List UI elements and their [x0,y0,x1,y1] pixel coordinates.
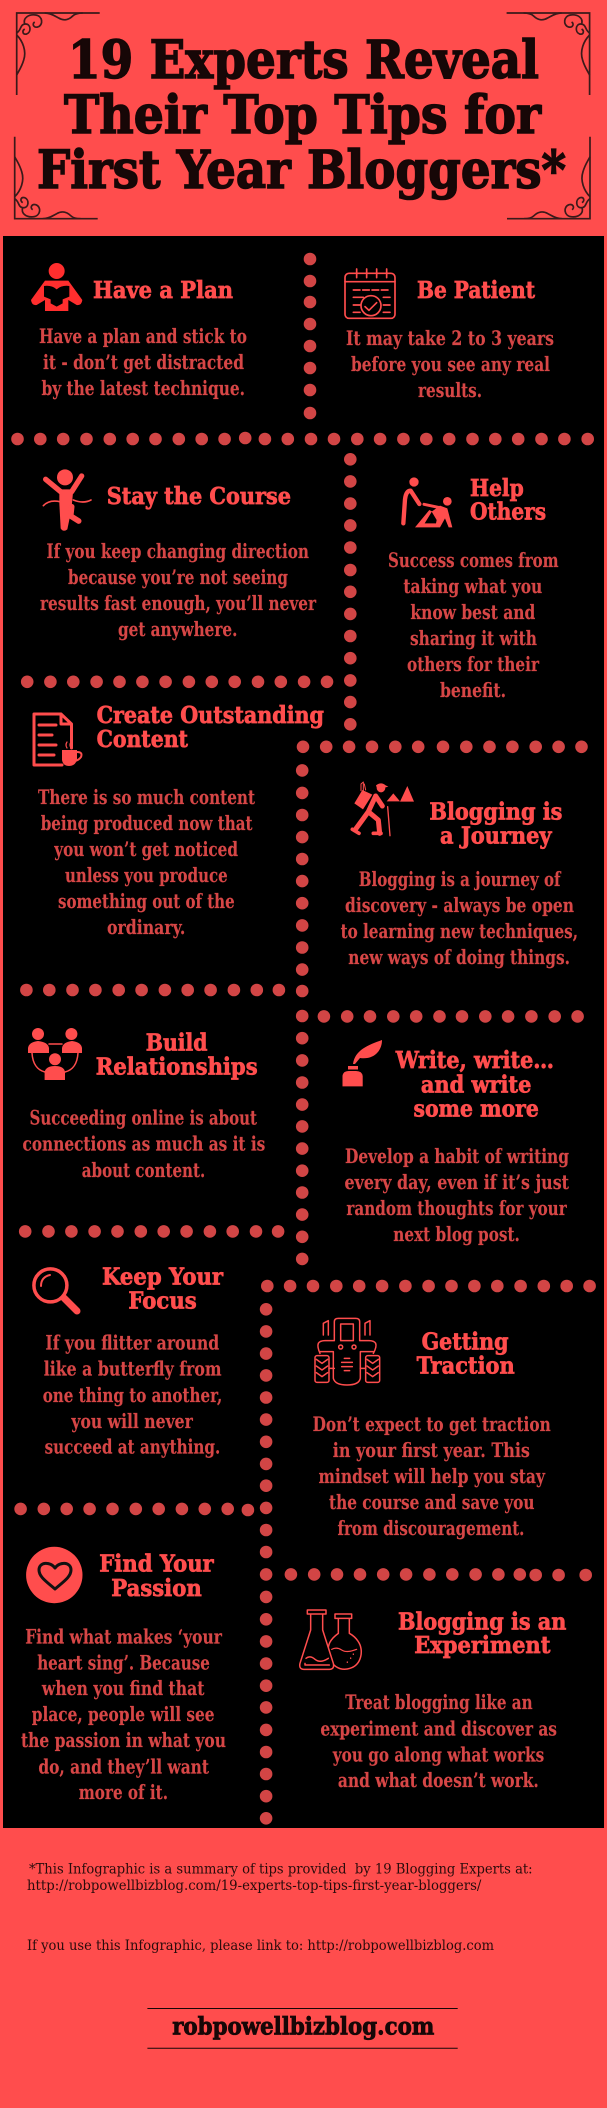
text block [21,1625,226,1804]
text block: connections as much as it is [22,1133,265,1156]
text block: by the latest technique. [42,377,245,400]
icon: person helping another up [403,477,452,527]
footer: source notes: http://robpowellbizblog.com/19-experts-top-tips-first-year-bloggers/ [27,1878,482,1894]
panel: Help Others [388,475,559,702]
text block [313,1413,551,1540]
footer: source notes: *This Infographic is a summary of tips provided by 19 Blogging Experts at: [29,1861,533,1877]
text block: taking what you [403,575,542,598]
text block: succeed at anything. [45,1436,220,1459]
text block: sharing it with [410,627,537,650]
text block: others for their [407,653,540,676]
footer: website banner [147,2008,458,2048]
heading: Focus [128,1288,197,1315]
heading: Passion [111,1575,202,1602]
text block: before you see any real [351,353,550,376]
heading [470,475,546,526]
ornament: bottom right corner [507,137,590,219]
text block [346,327,554,402]
dotted dividers [18,259,590,1818]
ornament: top left corner [17,13,100,95]
heading: Blogging is an [398,1608,567,1636]
panel: Stay the Course [40,469,317,641]
text block: get anywhere. [118,618,237,641]
icon: calendar with check [345,269,395,318]
text block: being produced now that [41,812,253,835]
text block [341,868,578,969]
text block [43,1332,222,1459]
text block: from discouragement. [338,1517,524,1540]
heading [97,702,324,753]
heading: Keep Your [102,1264,224,1291]
heading [99,1550,215,1602]
title: Their Top Tips for [64,85,542,146]
text block: when you find that [41,1677,204,1700]
text block [22,1107,265,1182]
text block: Success comes from [388,549,559,572]
panel: Getting Traction [313,1318,551,1540]
ornament: bottom left corner [15,137,98,219]
heading: Be Patient [417,277,535,304]
text block [40,540,317,641]
text block [38,786,255,939]
text block: results fast enough, you’ll never [40,592,317,615]
footer: website banner: robpowellbizblog.com [172,2012,434,2041]
heading: Stay the Course [107,483,291,510]
heading [429,799,562,850]
text block: next blog post. [393,1223,520,1246]
text block: know best and [410,601,536,624]
panel: black tips background [3,236,604,1828]
heading [395,1047,554,1122]
text block: Find what makes ‘your [25,1625,222,1648]
panel: Create Outstanding Content [34,702,324,939]
heading [102,1264,224,1315]
heading: Experiment [414,1632,551,1659]
panel: Blogging is an Experiment [300,1608,567,1792]
text block: If you flitter around [45,1332,219,1355]
text block: benefit. [440,679,506,702]
text block: ordinary. [107,916,185,939]
text block [344,1145,569,1246]
text block: one thing to another, [43,1384,222,1407]
text block: it - don’t get distracted [43,351,244,374]
text block [388,549,559,702]
icon: heart in circle [26,1547,82,1603]
text block: something out of the [58,890,235,913]
text block: It may take 2 to 3 years [346,327,554,350]
panel: Blogging is a Journey [341,782,578,969]
heading: Relationships [96,1053,258,1080]
heading: some more [414,1095,539,1122]
title: 19 Experts Reveal [68,30,539,91]
text block: There is so much content [38,786,255,809]
panel: Find Your Passion [21,1547,226,1804]
text block: and what doesn’t work. [338,1769,539,1792]
text block [39,325,247,400]
text block: Don’t expect to get traction [313,1413,551,1436]
text block: you won’t get noticed [54,838,238,861]
heading: Have a Plan [93,277,233,304]
footer: source notes [27,1861,533,1954]
heading [398,1608,567,1659]
panel: Build Relationships [22,1028,265,1182]
text block: Have a plan and stick to [39,325,247,348]
heading: Blogging is [429,799,562,826]
icon: connected people [28,1028,82,1080]
heading: Getting [422,1329,508,1356]
heading: Create Outstanding [97,702,324,729]
icon: document and coffee cup [34,714,82,766]
text block: like a butterfly from [44,1358,222,1381]
text block: heart sing’. Because [37,1651,210,1674]
text block: the course and save you [329,1491,534,1514]
text block: If you keep changing direction [46,540,309,563]
heading: Others [470,499,546,526]
heading: a Journey [440,823,552,850]
text block: mindset will help you stay [318,1465,546,1488]
icon: tractor [315,1318,380,1385]
heading [96,1029,258,1080]
title [37,30,566,201]
text block: results. [418,379,482,402]
icon: hiker with mountains [352,782,414,836]
heading: Traction [417,1353,515,1380]
heading: Find Your [99,1550,215,1578]
icon: person reading [31,263,82,311]
text block: place, people will see [32,1703,214,1726]
heading: and write [421,1072,531,1098]
text block: unless you produce [65,864,228,887]
heading: Content [97,726,188,753]
text block: in your first year. This [333,1439,530,1462]
text block: because you’re not seeing [68,566,288,589]
heading: Build [146,1029,208,1056]
text block: more of it. [79,1781,168,1804]
heading: Write, write… [395,1047,554,1074]
panel: Write, write and write some more [342,1040,569,1246]
text block: do, and they’ll want [38,1755,209,1778]
icon: quill and inkwell [342,1040,382,1086]
heading [417,1329,515,1380]
text block: Treat blogging like an [345,1691,533,1714]
panel: Have a Plan [31,263,247,400]
icon: magnifying glass [34,1269,77,1311]
text block: you go along what works [332,1743,544,1766]
text block: about content. [82,1159,205,1182]
ornament: top right corner [507,13,590,95]
icon: lab flasks [300,1610,361,1669]
text block: you will never [71,1410,193,1433]
footer: source notes: If you use this Infographic, please link to: http://robpowellbizblog.com [27,1938,494,1954]
text block [320,1691,557,1792]
heading: Help [470,475,524,502]
text block: the passion in what you [21,1729,226,1752]
icon: runner crossing the finish tape [43,469,91,531]
text block: Succeeding online is about [30,1107,257,1130]
header: title with ornamental frame [15,13,590,219]
panel: Keep Your Focus [34,1264,224,1459]
panel: Be Patient [345,269,554,402]
